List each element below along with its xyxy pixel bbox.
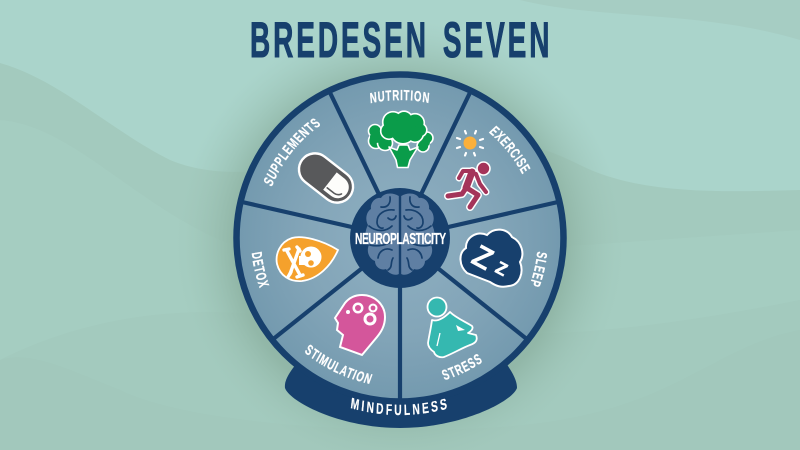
icon: sleep cloud	[460, 230, 522, 287]
icon: broccoli	[368, 112, 433, 168]
icon: meditating figure	[428, 298, 477, 357]
label: stress: STRESS	[442, 354, 482, 380]
icon: stimulated head	[335, 295, 385, 355]
icon: detox drop	[277, 237, 338, 281]
label: exercise: EXERCISE	[488, 126, 530, 174]
wheel	[233, 71, 567, 405]
label: mindfulness: MINDFULNESS	[350, 398, 447, 416]
hub: neuroplasticity brain	[350, 188, 450, 288]
label: supplements: SUPPLEMENTS	[264, 118, 320, 186]
letter: big Z: Z	[466, 238, 499, 277]
label: sleep: SLEEP	[531, 252, 548, 287]
label: neuroplasticity: NEUROPLASTICITY	[355, 230, 446, 248]
icon: supplement pill	[293, 147, 359, 209]
label: nutrition: NUTRITION	[370, 90, 430, 104]
mindfulness base	[284, 366, 517, 428]
letter: small z: z	[491, 253, 514, 282]
icon: runner	[448, 162, 490, 207]
label: stimulation: STIMULATION	[305, 344, 372, 384]
title: BREDESEN SEVEN	[250, 11, 552, 68]
icon: sun	[457, 131, 483, 156]
label: detox: DETOX	[252, 252, 270, 288]
